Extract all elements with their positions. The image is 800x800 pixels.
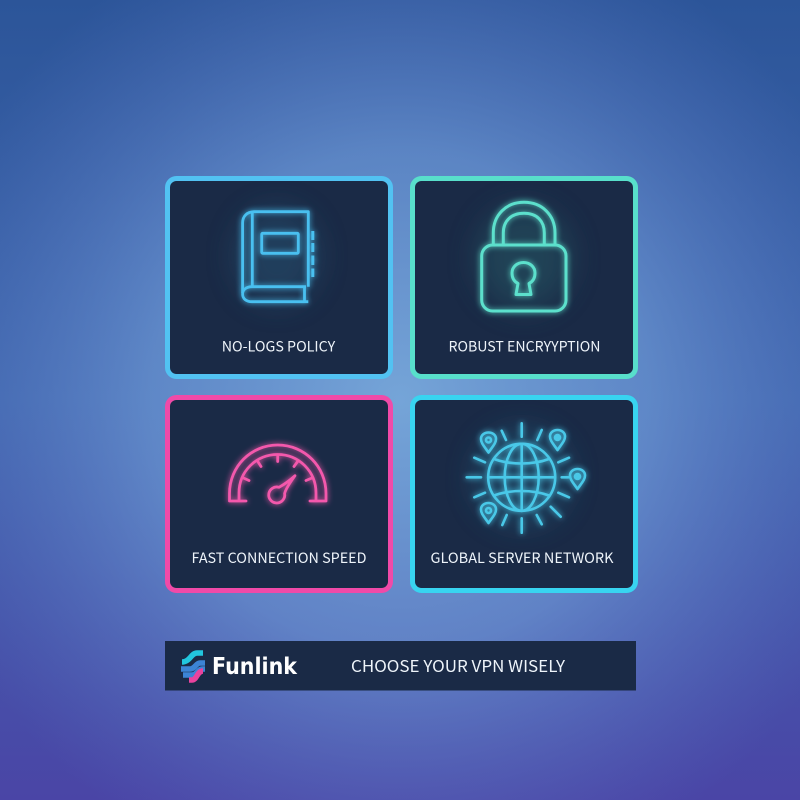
label: no-logs policy: NO-LOGS POLICY [222, 336, 335, 356]
icon: padlock [482, 202, 566, 311]
panel: robust encryption [412, 178, 636, 376]
icon: book [243, 212, 313, 302]
icon: funlink logo [181, 653, 205, 680]
tagline: CHOOSE YOUR VPN WISELY [351, 653, 566, 677]
footer banner [165, 641, 636, 690]
panel: global server network [412, 398, 636, 590]
label: fast connection speed: FAST CONNECTION SPEED [192, 547, 367, 568]
icon: globe with pins [467, 423, 585, 533]
panel: fast connection speed [168, 398, 390, 590]
label: robust encryption: ROBUST ENCRYYPTION [448, 336, 600, 356]
icon: speedometer [230, 445, 326, 503]
logo wordmark: Funlink [212, 654, 298, 680]
label: global server network: GLOBAL SERVER NETWORK [430, 547, 614, 568]
panel: no-logs policy [168, 178, 390, 376]
